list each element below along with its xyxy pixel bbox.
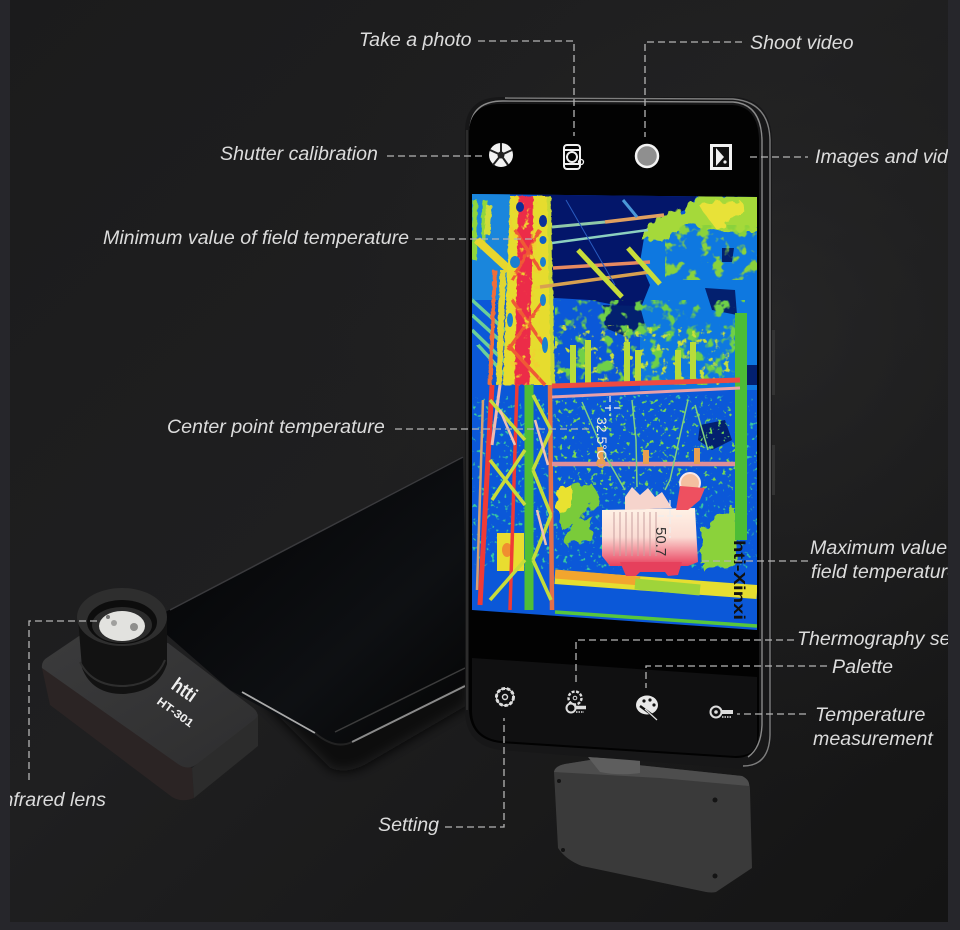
callout: maximum temperature: field temperature: [811, 561, 958, 583]
callout: infrared lens: [0, 621, 106, 811]
callout: shoot video: Shoot video: [750, 32, 854, 54]
icon: palette: [636, 696, 658, 720]
icon: temperature measurement: [710, 706, 733, 718]
callout: shoot video: [645, 32, 854, 137]
crossbars: [540, 200, 757, 626]
thermal image: [470, 190, 760, 635]
tower gaps: [507, 202, 548, 353]
callout: maximum temperature: [702, 540, 948, 582]
module brand: [156, 676, 199, 728]
icon: thermography settings: [566, 692, 586, 712]
flat phone: [150, 456, 468, 771]
sky: [540, 190, 700, 310]
tower speckle: [510, 196, 540, 386]
main phone: [465, 97, 775, 769]
callout: setting: Setting: [378, 814, 439, 836]
icon: shutter: [489, 143, 513, 167]
thermal image: hti-Xinxi: [730, 540, 747, 620]
callout: shutter calibration: Shutter calibration: [220, 143, 378, 165]
lens glass: [99, 611, 145, 641]
callout: setting: [378, 718, 504, 836]
callout: temperature measurement: Temperature: [815, 704, 925, 726]
upper right region: [640, 223, 757, 390]
dongle: [554, 757, 752, 892]
callout: center point temperature: Center point temperature: [167, 416, 385, 438]
icon: record button: [636, 145, 658, 167]
lens barrel: [77, 588, 167, 694]
image readouts: 32.5°C: [594, 417, 610, 460]
callout: infrared lens: Infrared lens: [0, 789, 106, 811]
tower lower: [477, 385, 552, 610]
callout: take a photo: [359, 29, 574, 136]
callout: thermography settings: [575, 631, 948, 682]
callout: palette: Palette: [832, 656, 893, 678]
callout: minimum temperature: Minimum value of field temperature: [103, 227, 409, 249]
callout: temperature measurement: measurement: [813, 728, 934, 750]
module brand: HT-301: [154, 696, 196, 731]
module brand: htti: [167, 674, 201, 707]
navy blotch: [698, 420, 732, 450]
module side faces: [42, 668, 194, 800]
icon: camera flip: [564, 145, 584, 169]
left cool region: [470, 190, 510, 300]
transformer: [602, 473, 705, 576]
icon: settings gear: [496, 688, 514, 706]
thermal image: 50.7: [652, 527, 669, 556]
icon: gallery: [710, 144, 732, 170]
callout: take a photo: Take a photo: [359, 29, 472, 51]
tower upper: [472, 196, 553, 385]
lens module HT-301: [42, 588, 258, 800]
module top face: [42, 632, 257, 768]
callout: temperature measurement: [737, 704, 934, 750]
foliage: [472, 195, 760, 570]
callout: palette: [646, 656, 893, 688]
